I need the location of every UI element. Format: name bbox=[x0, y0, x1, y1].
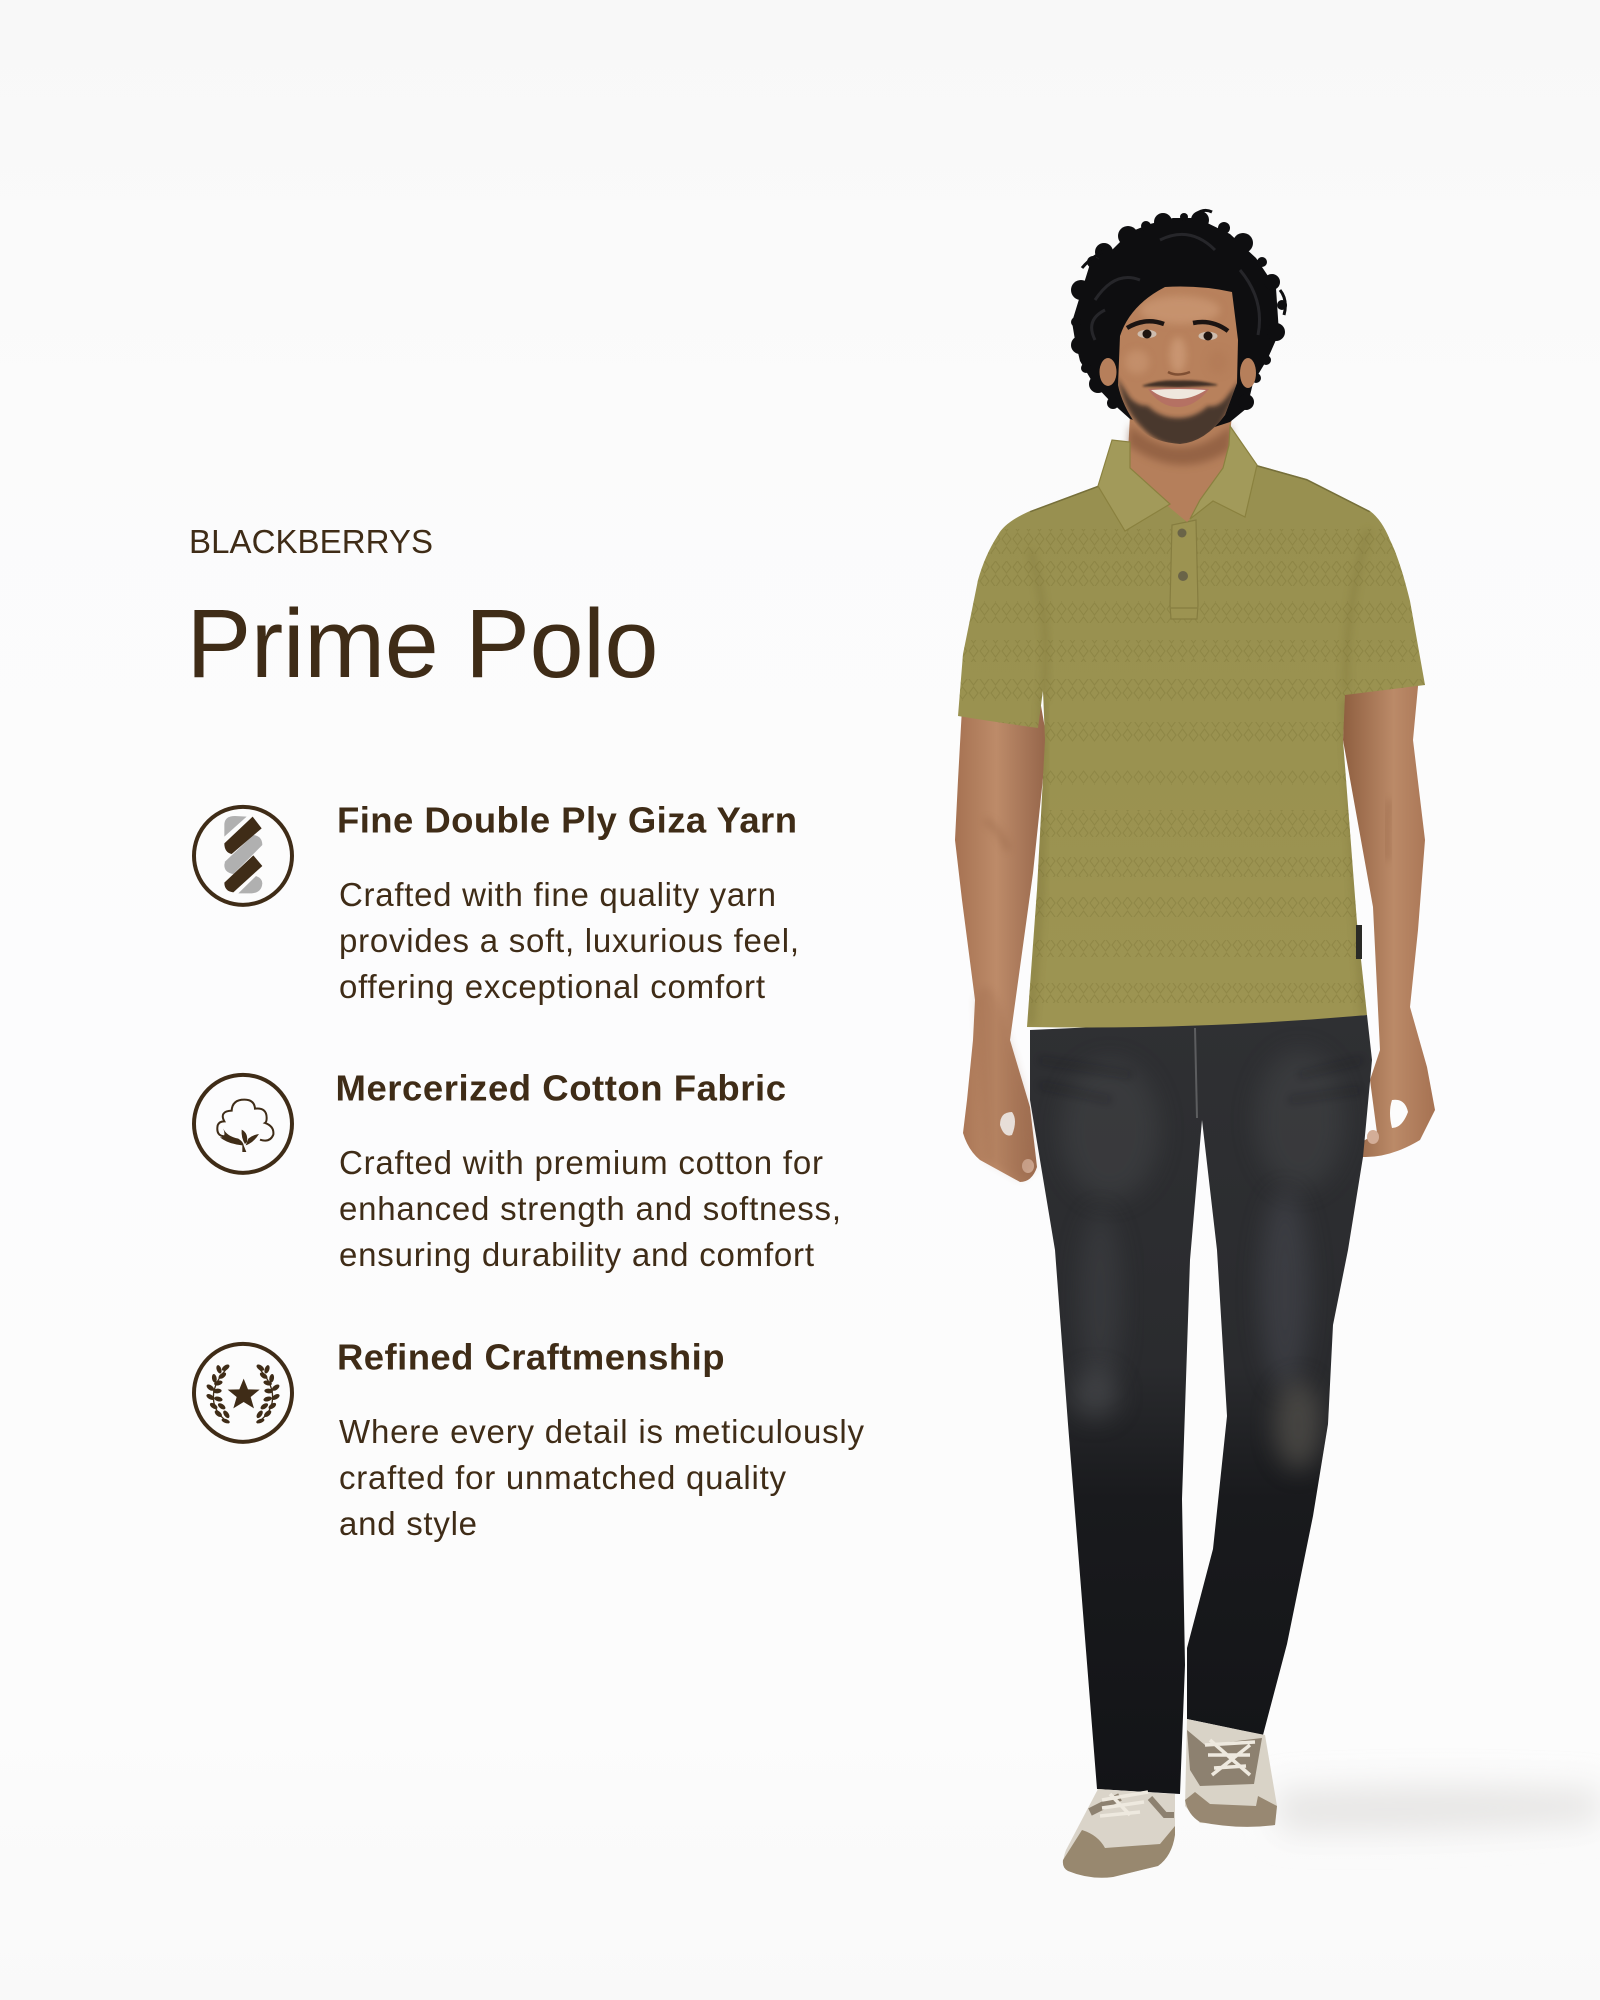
right shoe bbox=[1185, 1719, 1277, 1827]
description bbox=[339, 1413, 864, 1542]
hair bbox=[1071, 210, 1287, 435]
icon: cotton boll bbox=[194, 1075, 292, 1173]
face bbox=[1116, 287, 1240, 447]
title: Prime Polo bbox=[186, 589, 658, 698]
placket and buttons bbox=[1146, 506, 1198, 619]
side tag bbox=[1356, 925, 1362, 959]
eyes bbox=[1138, 330, 1218, 340]
panel: refined craftmenship bbox=[194, 1336, 865, 1542]
jeans bbox=[1030, 1015, 1372, 1794]
nose bbox=[1168, 372, 1190, 374]
ears bbox=[1100, 358, 1256, 388]
left shoe bbox=[1063, 1789, 1175, 1878]
brand label: BLACKBERRYS bbox=[189, 523, 433, 560]
heading: Fine Double Ply Giza Yarn bbox=[337, 800, 797, 840]
description: and style bbox=[339, 1505, 477, 1542]
heading: Mercerized Cotton Fabric bbox=[336, 1068, 786, 1108]
description: offering exceptional comfort bbox=[339, 968, 765, 1005]
hand details bbox=[975, 800, 1408, 1180]
description: provides a soft, luxurious feel, bbox=[339, 922, 799, 959]
description bbox=[339, 876, 799, 1005]
description: crafted for unmatched quality bbox=[339, 1459, 786, 1496]
description: Crafted with fine quality yarn bbox=[339, 876, 776, 913]
left arm and hand bbox=[955, 690, 1047, 1182]
description: Where every detail is meticulously bbox=[339, 1413, 864, 1450]
model figure bbox=[950, 210, 1435, 1878]
description: ensuring durability and comfort bbox=[339, 1236, 814, 1273]
mouth bbox=[1148, 388, 1209, 407]
polo shirt bbox=[950, 465, 1430, 1028]
icon: twisted yarn bbox=[194, 807, 292, 905]
panel: fine double ply giza yarn bbox=[194, 800, 799, 1005]
icon: laurel wreath and star bbox=[194, 1344, 292, 1442]
eyebrows bbox=[1127, 321, 1228, 331]
right arm and hand bbox=[1343, 665, 1435, 1157]
mustache bbox=[1143, 381, 1217, 387]
collar bbox=[1098, 426, 1257, 531]
description: Crafted with premium cotton for bbox=[339, 1144, 823, 1181]
neck bbox=[1127, 415, 1232, 522]
heading: Refined Craftmenship bbox=[337, 1336, 724, 1378]
floor shadow bbox=[1275, 1786, 1600, 1833]
description: enhanced strength and softness, bbox=[339, 1190, 841, 1227]
panel: mercerized cotton fabric bbox=[194, 1068, 841, 1273]
description bbox=[339, 1144, 841, 1273]
